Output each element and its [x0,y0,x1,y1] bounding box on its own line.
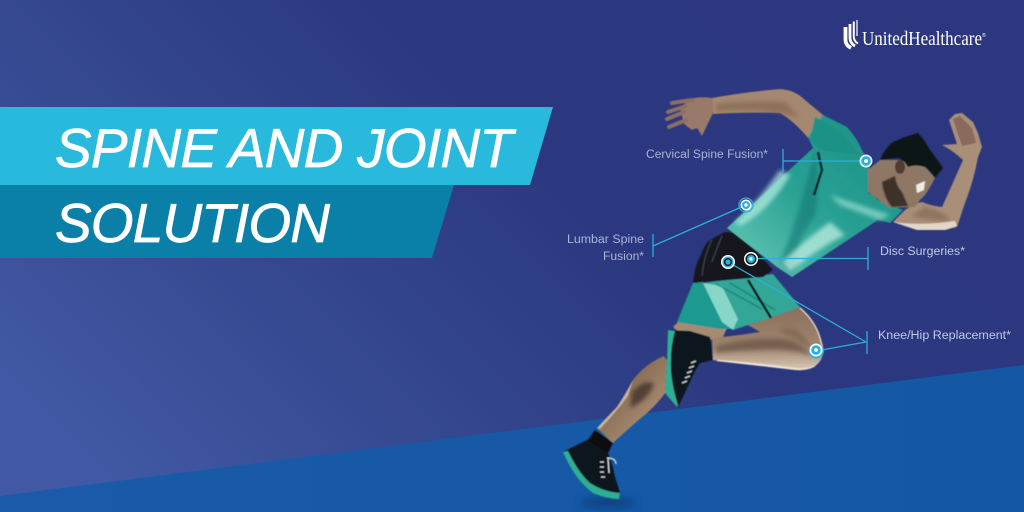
rear thigh [673,320,727,342]
callout marker [860,154,872,168]
callout label: Lumbar Spine [567,234,644,246]
shirt [727,115,903,277]
front leg [665,307,823,407]
callout label: Disc Surgeries* [880,246,966,258]
hip marker [721,255,735,269]
shorts: rear teal panel [677,282,731,329]
callout line [653,205,746,257]
title banner [0,107,553,258]
front shoe and sock [665,330,713,407]
callout marker [739,198,753,212]
callout line [783,149,866,172]
logo icon: shield [846,20,858,48]
callout line [728,262,867,354]
callout line [751,247,868,270]
front hand shading [953,116,976,146]
callout marker [744,252,758,266]
shorts: drawstring [748,280,771,318]
banner: bottom band [0,185,454,258]
hair [880,133,943,178]
callout: disc surgeries [744,246,966,270]
rear arm [667,89,823,138]
face highlight [916,181,925,193]
banner: top band [0,107,553,185]
callout: knee/hip replacement [721,255,1012,358]
logo registered mark: ® [982,32,986,39]
ear [895,160,905,174]
rear shoe laces [600,458,616,477]
callout label: Fusion* [603,251,645,263]
logo: UnitedHealthcare [846,20,986,50]
front arm [893,113,982,230]
beard [882,176,908,207]
callout: lumbar spine fusion [567,198,753,263]
shorts: dark waist panel [693,232,773,283]
title line 1: SPINE AND JOINT [55,117,516,179]
rear hand [667,97,713,136]
callout: cervical spine fusion [646,149,872,172]
shoe shadow [580,498,636,508]
rear shoe [563,440,620,499]
runner figure [563,89,982,508]
ground slope [0,365,1024,512]
rear shoe sole [563,451,620,499]
title line 2: SOLUTION [55,192,330,254]
callout label: Knee/Hip Replacement* [878,330,1012,342]
neck and head [868,133,943,208]
knee marker [808,344,824,358]
shorts: front teal panel [703,274,800,330]
logo wordmark: UnitedHealthcare [862,28,982,50]
front shoe laces [682,361,696,383]
rear leg [563,356,672,499]
callout label: Cervical Spine Fusion* [646,149,769,161]
front shoe sole [665,330,678,407]
rear sock [585,430,613,455]
